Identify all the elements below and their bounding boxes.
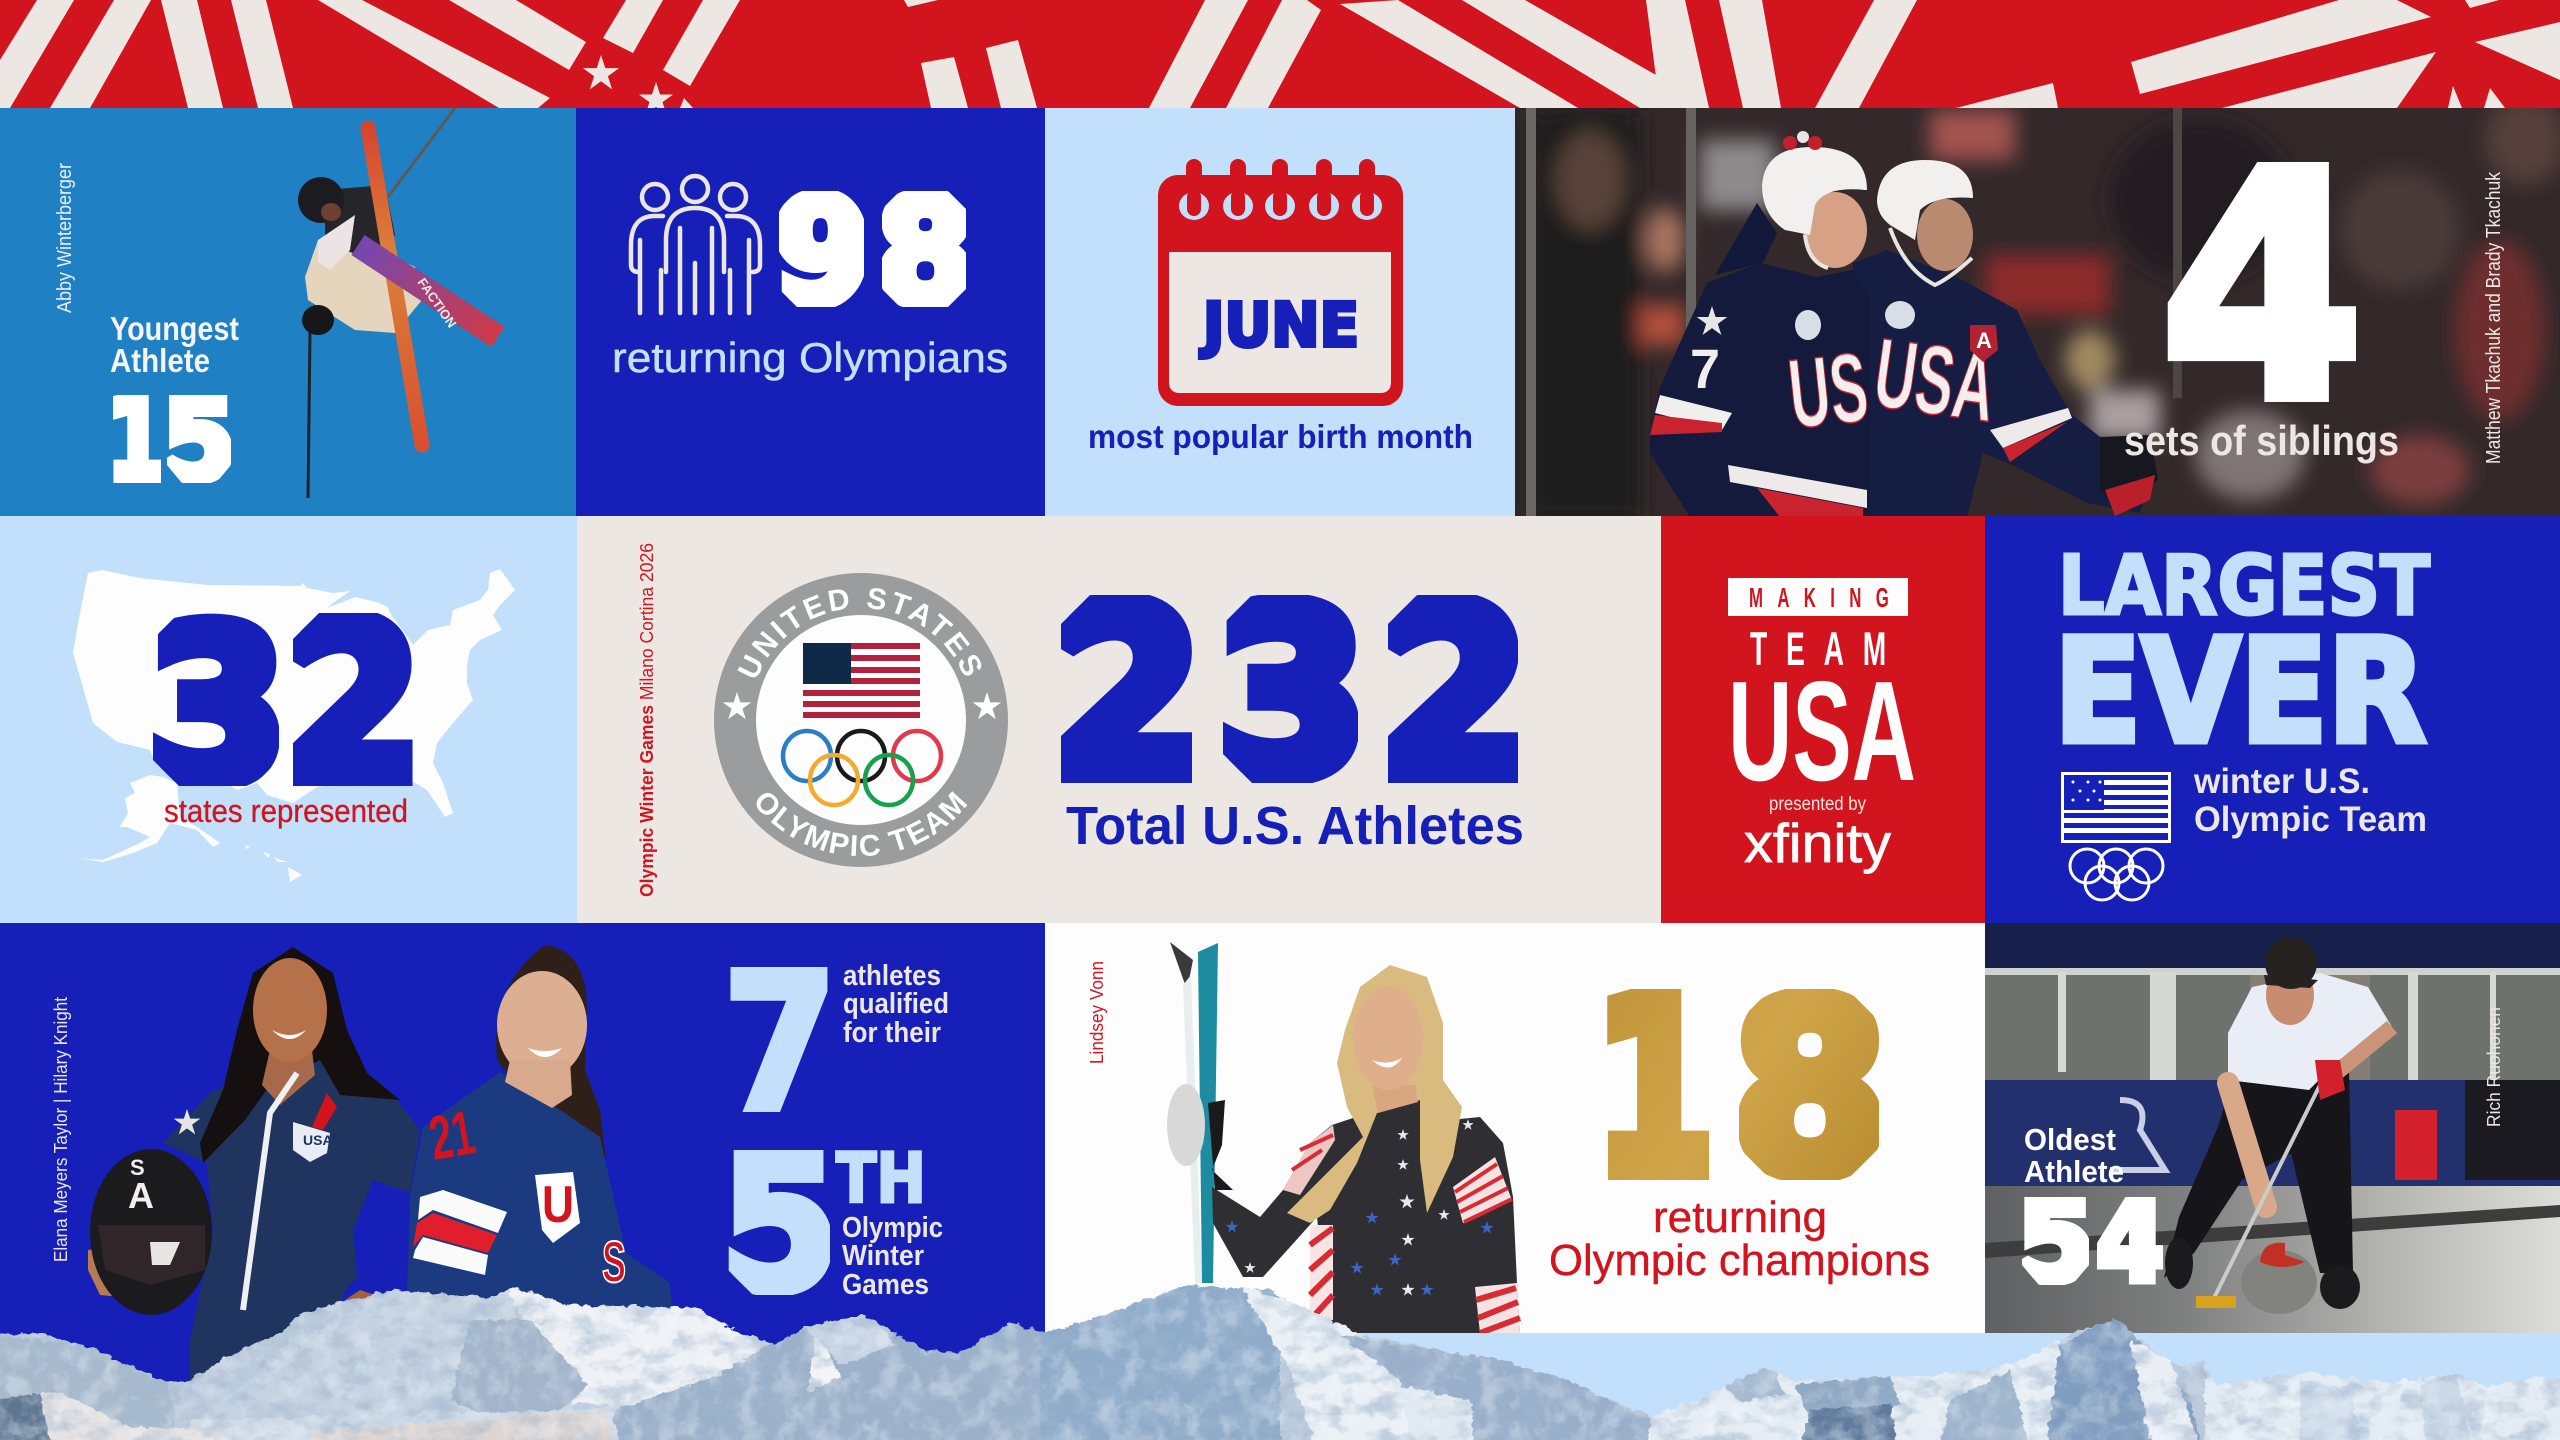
- label: returning Olympic champions: [1549, 1193, 1930, 1285]
- icon: calendar: [1158, 159, 1403, 406]
- logo: United States Olympic Team: [714, 573, 1008, 867]
- photo: Elana Meyers Taylor: A: [128, 1175, 154, 1216]
- label: sets of siblings: sets of siblings: [2124, 417, 2399, 464]
- number: 98: 8: [877, 168, 974, 337]
- icon: Olympic rings: [2070, 849, 2163, 900]
- label: athletes qualified: [843, 960, 949, 1049]
- label: oldest athlete: Oldest: [2024, 1122, 2116, 1157]
- number: 18: 8: [1732, 952, 1888, 1227]
- number: 98: [779, 191, 966, 307]
- label: youngest athlete: Youngest: [110, 310, 239, 347]
- caption: games name: Olympic Winter Games Milano Cortina 2026: [637, 543, 657, 897]
- panel: youngest athlete: [0, 108, 576, 516]
- panel: oldest athlete photo: [1985, 923, 2560, 1333]
- label: returning Olympians: returning Olympians: [612, 334, 1008, 381]
- number: 32: 3: [146, 583, 288, 832]
- logo: United States Olympic Team: OLYMPIC TEAM: [756, 791, 968, 856]
- number: 54: [2022, 1197, 2163, 1285]
- photo: hockey players: [1650, 131, 2158, 517]
- label: MAKING: [1728, 578, 1908, 616]
- label: total athletes: Total U.S. Athletes: [1066, 796, 1524, 856]
- label: athletes qualified: for their: [843, 1017, 941, 1049]
- number: 5: 5: [720, 1115, 840, 1334]
- mountains: [0, 1270, 2560, 1440]
- panel: returning Olympians: [576, 108, 1045, 516]
- number: 15: [113, 395, 231, 483]
- photo: hockey players: A: [1976, 328, 1992, 353]
- number: 232: [1061, 595, 1518, 783]
- panel: states represented: [0, 516, 577, 923]
- photo: curler: [2164, 937, 2392, 1314]
- photo: Hilary Knight: 21: [424, 1098, 480, 1174]
- label: Olympic Winter Games: [842, 1212, 943, 1301]
- top banner: red with stripes: [0, 0, 2560, 115]
- number: 32: [153, 613, 413, 786]
- heading: LARGEST: LARGEST: [2058, 539, 2430, 634]
- number: 232: 2: [1051, 558, 1203, 829]
- Olympic rings: [783, 731, 941, 805]
- photo: skier: FACTION: [415, 275, 460, 330]
- photo: Lindsey Vonn: [1167, 942, 1520, 1333]
- caption: Abby Winterberger: Abby Winterberger: [54, 163, 76, 313]
- photo: hockey players: USA: [1868, 317, 2002, 442]
- label: athletes qualified: qualified: [843, 988, 949, 1020]
- label: Olympic Winter Games: Games: [842, 1269, 929, 1301]
- label: winter U.S. Olympic Team: Olympic Team: [2194, 800, 2427, 839]
- label: returning Olympic champions: Olympic champions: [1549, 1236, 1930, 1285]
- label: TEAM: TEAM: [1750, 624, 1886, 676]
- panel: fifth Olympic Games: [0, 923, 1045, 1382]
- label: winter U.S. Olympic Team: winter U.S.: [2193, 762, 2370, 801]
- label: Olympic Winter Games: Winter: [842, 1240, 924, 1272]
- label: athletes qualified: athletes: [843, 960, 941, 992]
- number: 54: 5: [2017, 1177, 2095, 1307]
- number: 232: 2: [1378, 558, 1530, 829]
- photo: skier: [298, 108, 498, 498]
- photo: Elana Meyers Taylor: S: [130, 1155, 145, 1180]
- label: TH: TH: [836, 1139, 926, 1219]
- photo: hockey players: 7: [1690, 337, 1720, 400]
- caption: Lindsey Vonn: Lindsey Vonn: [1087, 961, 1107, 1064]
- panel: making team USA: [1661, 516, 1985, 923]
- sky strip behind mountains: [1045, 1333, 2560, 1440]
- map: United States: [73, 569, 515, 882]
- caption: Rich Ruohonen: Rich Ruohonen: [2484, 1007, 2504, 1127]
- photo: Hilary Knight: S: [602, 1230, 626, 1295]
- icon: group of people: [631, 176, 760, 313]
- label: oldest athlete: [2024, 1128, 2123, 1182]
- label: MAKING: MAKING: [1749, 582, 1889, 613]
- photo: Hilary Knight: U: [542, 1176, 574, 1234]
- number: 15: 5: [162, 376, 236, 506]
- photo: Hilary Knight: [407, 945, 672, 1310]
- panel: total athletes: [637, 543, 1524, 897]
- heading: EVER: EVER: [2054, 608, 2426, 775]
- photo: crowd background: [1530, 95, 2560, 520]
- panel: birth month: [1045, 108, 1515, 516]
- number: 98: 9: [774, 168, 871, 337]
- panel: sets of siblings photo: [1515, 95, 2560, 520]
- label: youngest athlete: [110, 310, 239, 379]
- number: 18: 1: [1594, 947, 1716, 1229]
- label: USA: USA: [1728, 652, 1916, 811]
- caption: athlete names: Elana Meyers Taylor | Hilary Knight: [51, 997, 71, 1262]
- flag: [803, 643, 920, 718]
- photo: Elana Meyers Taylor: USA: [303, 1132, 333, 1148]
- caption: Tkachuk brothers: Matthew Tkachuk and Brady Tkachuk: [2483, 171, 2505, 464]
- logo: xfinity: xfinity: [1744, 812, 1892, 874]
- label: most popular birth month: most popular birth month: [1088, 418, 1473, 455]
- number: 15: 1: [107, 373, 165, 506]
- number: 4: 4: [2160, 106, 2368, 472]
- logo: United States Olympic Team: UNITED STATES: [738, 588, 982, 678]
- number: 7: 7: [723, 933, 837, 1154]
- label: presented by: presented by: [1769, 794, 1866, 815]
- label: returning Olympic champions: returning: [1653, 1193, 1827, 1242]
- icon: calendar: JUNE: [1199, 290, 1359, 361]
- number: 54: 4: [2095, 1177, 2167, 1307]
- label: oldest athlete: Athlete: [2024, 1154, 2124, 1189]
- panel: returning champions: [1045, 923, 1985, 1333]
- photo: Elana Meyers Taylor: [88, 947, 420, 1390]
- panel: largest ever: [1985, 516, 2560, 923]
- photo: hockey players: US: [1784, 331, 1873, 449]
- icon: flag outline: [2061, 772, 2171, 843]
- number: 18: [1607, 989, 1879, 1180]
- label: winter U.S. Olympic Team: [2193, 762, 2427, 839]
- label: youngest athlete: Athlete: [110, 342, 210, 379]
- number: 232: 3: [1214, 561, 1368, 829]
- label: states represented: states represented: [164, 793, 408, 829]
- number: 32: 2: [284, 578, 422, 830]
- label: Olympic Winter Games: Olympic: [842, 1212, 943, 1244]
